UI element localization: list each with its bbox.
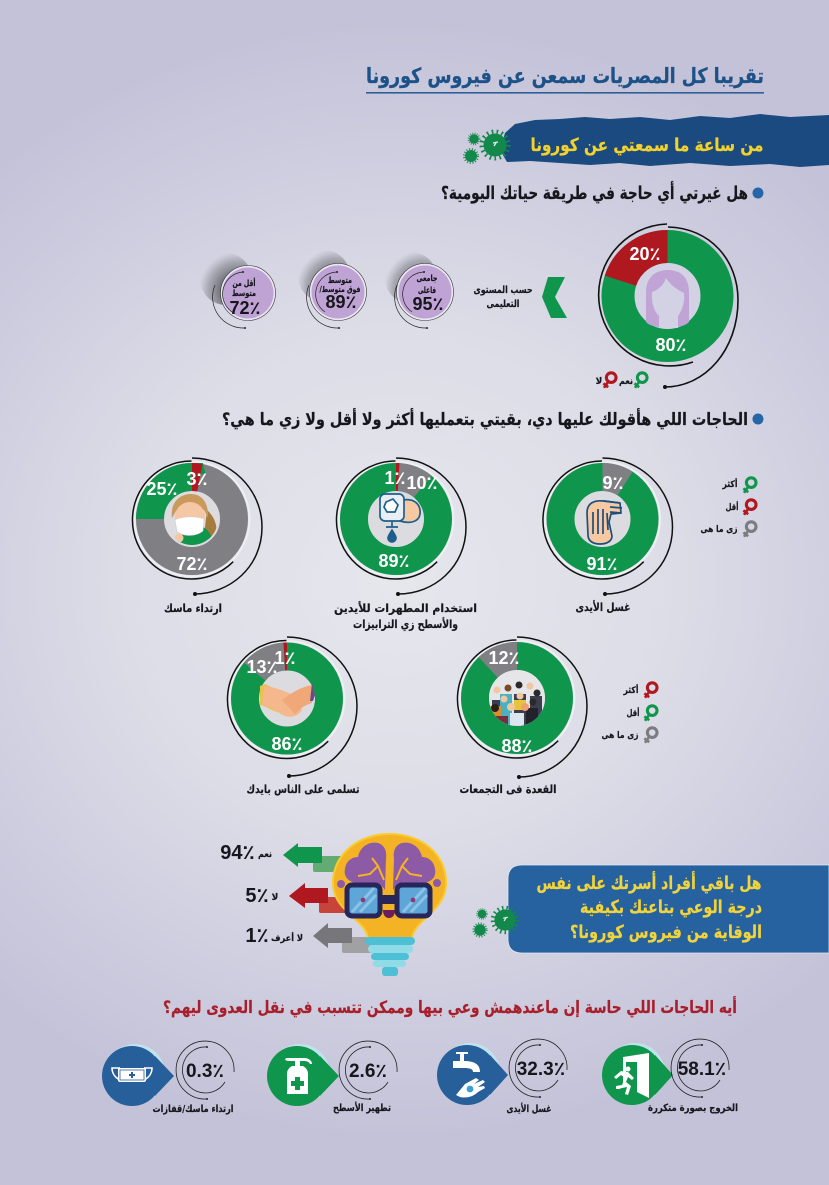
question box — [508, 865, 829, 953]
stat: unknown 1 — [245, 925, 303, 947]
question box: هل باقي أفراد أسرتك على نفس — [536, 871, 762, 894]
legend: first row: أكثر — [722, 478, 738, 490]
label: sanitizer: والأسطح زي الترابيزات — [353, 617, 458, 632]
label: gatherings: القعدة فى التجمعات — [460, 782, 556, 796]
stat: mask 0.3: ارتداء ماسك/قفازات — [152, 1104, 234, 1115]
stat: below average 72: 72٪ — [229, 298, 261, 318]
label: handshake: تسلمى على الناس بايدك — [246, 782, 360, 796]
stat: below average 72: أقل من — [232, 277, 256, 289]
stat: above average 89: متوسط — [328, 276, 352, 286]
stat: unknown 1: 1٪ — [245, 925, 269, 947]
legend: second row: زى ما هى — [602, 731, 638, 741]
legend: second row: أكثر — [623, 684, 638, 696]
arrow: yes — [283, 843, 345, 872]
chart: gatherings donut: 88٪ — [501, 736, 533, 756]
chart: handshake donut: 1٪ — [274, 648, 296, 668]
heading: question 2: الحاجات اللي هأقولك عليها دي، بقيتي بتعمليها أكثر ولا أقل ولا زي ما هي؟ — [222, 408, 748, 430]
stat: going out 58.1 — [602, 1039, 738, 1114]
chart: gatherings donut — [457, 637, 587, 779]
illustration: light bulb — [333, 834, 446, 976]
stat: hand washing 32.3 — [437, 1039, 567, 1115]
icon: exit door — [614, 1053, 649, 1098]
stat: no 5: 5٪ — [245, 885, 269, 907]
stat: below average 72: متوسط — [232, 289, 256, 299]
bulb base — [365, 937, 415, 976]
chart: handshake donut: 13٪ — [246, 657, 278, 677]
chart: hand washing donut: 9٪ — [602, 473, 624, 493]
stat: above average 89: 89٪ — [325, 292, 357, 312]
chart: gatherings donut: 12٪ — [488, 648, 520, 668]
arrow: unknown — [313, 923, 374, 953]
stat: going out 58.1: 58.1٪ — [678, 1059, 726, 1080]
icon: virus group top — [464, 132, 508, 163]
stat: above average 89 — [298, 250, 366, 329]
chart: sanitizer donut: 1٪ — [384, 468, 406, 488]
icon: crowd — [489, 670, 545, 726]
chart: mask donut: 72٪ — [176, 554, 208, 574]
stat: mask 0.3: 0.3٪ — [186, 1061, 224, 1082]
label: sanitizer — [334, 601, 477, 632]
icon: tap and hand — [453, 1052, 485, 1097]
label: mask: ارتداء ماسك — [164, 601, 222, 615]
stat: unknown 1: لا أعرف — [271, 932, 303, 944]
icon: handshake — [260, 683, 315, 717]
legend: second row: أقل — [626, 707, 640, 719]
legend: first row: أقل — [726, 501, 738, 513]
chart: sanitizer donut: 89٪ — [378, 551, 410, 571]
stat: surfaces 2.6: 2.6٪ — [349, 1061, 387, 1082]
brain — [337, 843, 441, 890]
stat: yes 94 — [220, 842, 272, 864]
stat: surfaces 2.6 — [267, 1041, 397, 1114]
icon: face mask — [112, 1068, 152, 1082]
stat: hand washing 32.3: غسل الأيدى — [506, 1102, 552, 1115]
chart: mask donut: 25٪ — [146, 479, 178, 499]
label: by education: التعليمى — [486, 299, 520, 310]
chart: hand washing donut: 91٪ — [586, 554, 618, 574]
section banner — [500, 114, 829, 167]
chart: mask donut — [132, 458, 262, 596]
stat: university 95: 95٪ — [412, 294, 444, 314]
arrow: chevron — [542, 277, 567, 318]
section banner: من ساعة ما سمعتي عن كورونا — [530, 135, 764, 156]
icon: woman silhouette — [646, 270, 689, 328]
stat: mask 0.3 — [102, 1041, 234, 1115]
stat: university 95: جامعى — [416, 274, 438, 284]
legend: second row — [602, 683, 657, 743]
label: hand washing: غسل الأيدى — [576, 600, 630, 614]
stat: university 95 — [385, 252, 454, 329]
arrow: no — [289, 883, 351, 913]
icon: sanitizer bottle — [285, 1058, 312, 1094]
chart: hand washing donut — [543, 458, 672, 596]
chart: mask donut: 3٪ — [186, 469, 208, 489]
stat: hand washing 32.3: 32.3٪ — [517, 1059, 565, 1080]
stat: surfaces 2.6: تطهير الأسطح — [333, 1101, 391, 1114]
stat: above average 89: فوق متوسط/ — [320, 285, 360, 294]
icon: woman with mask — [172, 494, 216, 548]
stat: university 95: فاعلى — [418, 286, 436, 296]
legend: first row — [700, 478, 756, 537]
icon: sanitizer dispenser — [380, 494, 420, 542]
question box: درجة الوعي بتاعتك بكيفية — [580, 897, 762, 918]
stat: below average 72 — [200, 253, 276, 329]
chart: sanitizer donut: 10٪ — [406, 473, 438, 493]
label: by education — [474, 285, 532, 310]
stat: yes 94: نعم — [258, 850, 272, 860]
chart: main donut: 80٪ — [655, 335, 687, 355]
stat: yes 94: 94٪ — [220, 842, 255, 864]
legend: main donut — [596, 373, 647, 388]
stat: going out 58.1: الخروج بصورة متكررة — [648, 1103, 738, 1114]
question box: الوقاية من فيروس كورونا؟ — [570, 922, 762, 943]
label: sanitizer: استخدام المطهرات للأيدين — [334, 601, 477, 615]
chart: main donut: 20٪ — [629, 244, 661, 264]
legend: main donut: لا — [596, 377, 602, 387]
chart: handshake donut: 86٪ — [271, 734, 303, 754]
chart: sanitizer donut — [336, 458, 466, 596]
icon: washing hands — [587, 501, 622, 544]
glasses — [347, 885, 430, 916]
chart: handshake donut — [227, 637, 357, 778]
label: by education: حسب المستوى — [474, 285, 532, 296]
chart: main donut — [599, 224, 738, 389]
icon: virus group box — [473, 908, 517, 937]
legend: main donut: نعم — [619, 377, 633, 387]
legend: first row: زى ما هى — [700, 525, 738, 535]
stat: no 5: لا — [272, 893, 278, 903]
